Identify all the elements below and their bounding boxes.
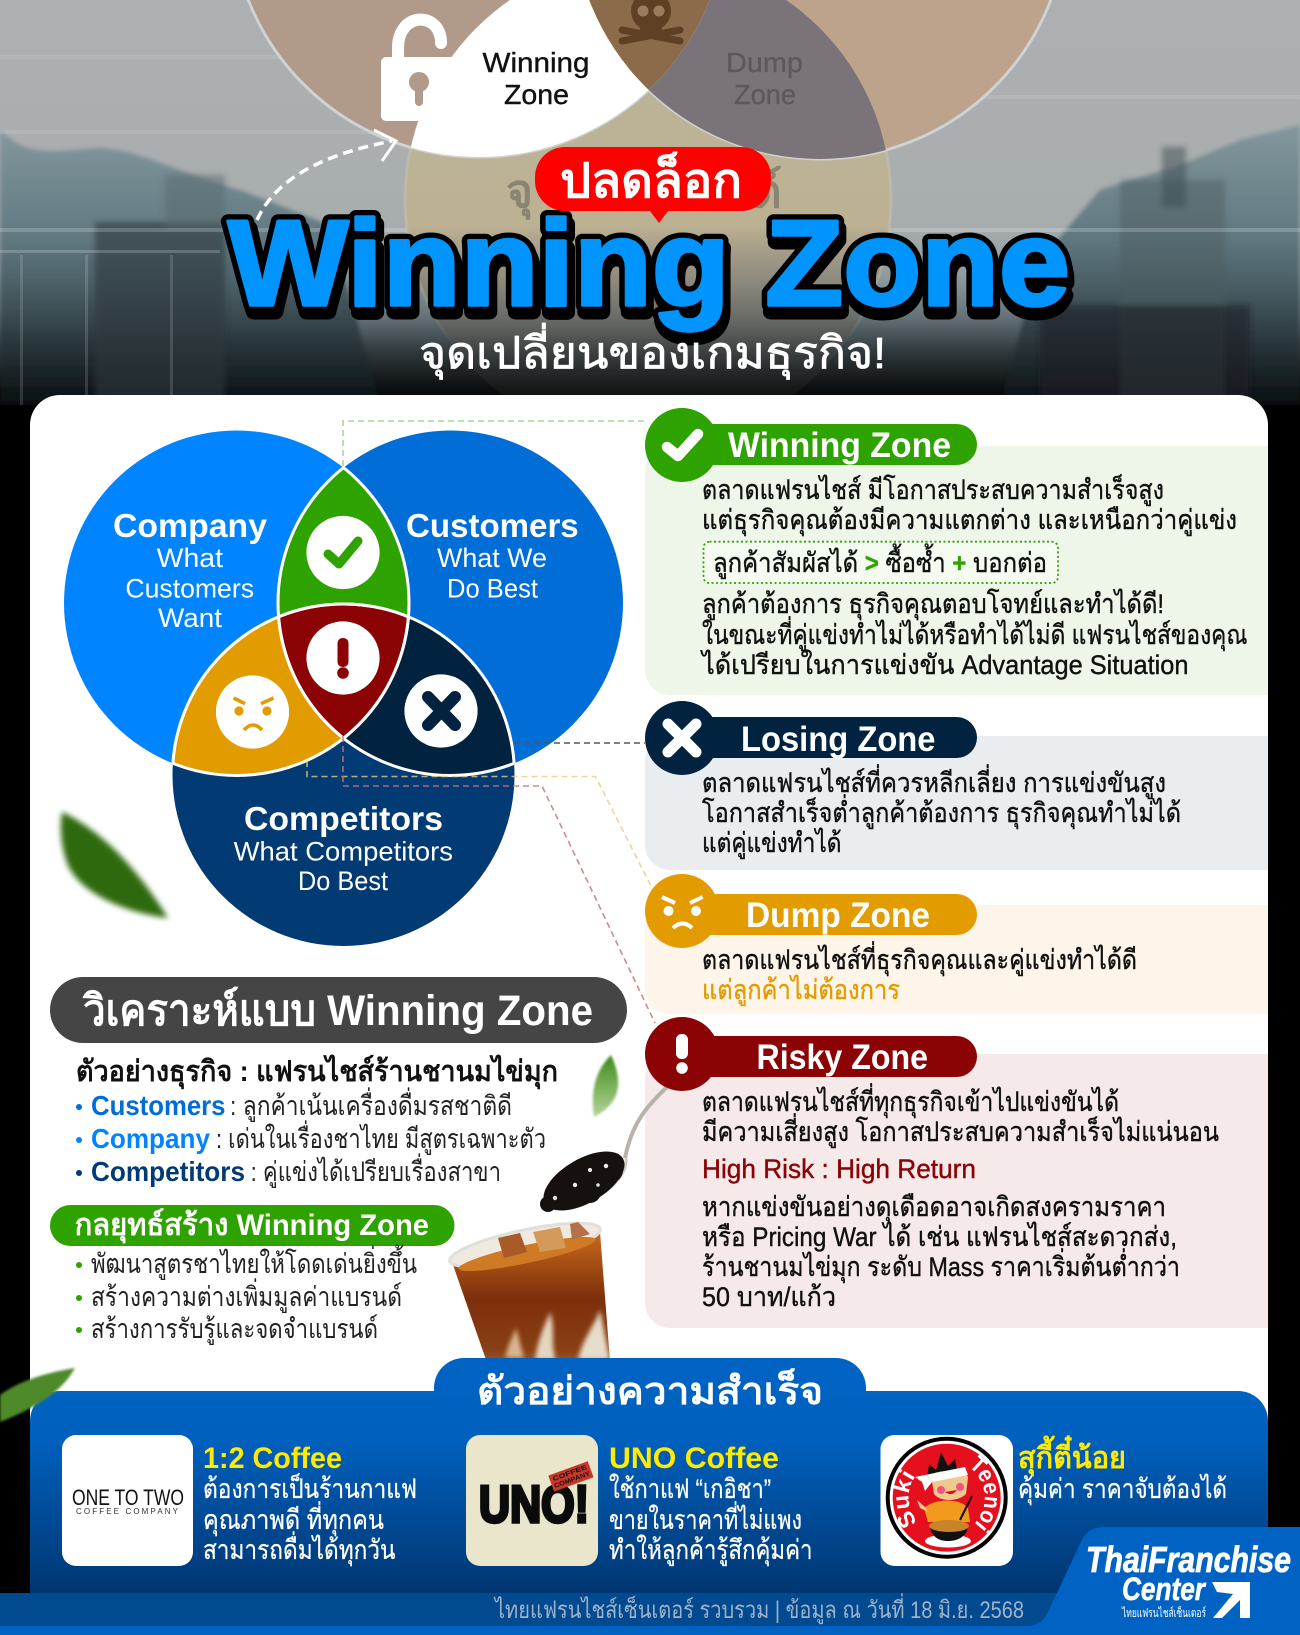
leaf left — [61, 812, 168, 918]
example: Suki Teenoi — [880, 1435, 1227, 1566]
example: 1:2 Coffee: ONE TO TWO — [72, 1485, 184, 1510]
logo mascot — [915, 1452, 972, 1548]
label: Competitors: Do Best — [298, 866, 388, 896]
top venn diagram — [246, 0, 1052, 395]
label: Competitors: Competitors — [244, 800, 443, 837]
badge: ปลดล็อก: ปลดล็อก — [560, 151, 742, 208]
icon: angry face — [216, 675, 289, 749]
zone header pill — [645, 874, 977, 948]
zone body text: มีความเสี่ยงสูง โอกาสประสบความสำเร็จไม่แน่นอน — [702, 1113, 1219, 1148]
example: UNO Coffee: UNO Coffee — [609, 1442, 779, 1475]
label: Competitors — [234, 800, 453, 896]
icon: exclamation — [306, 621, 380, 695]
title: Winning Zone: Winning Zone — [231, 202, 1071, 338]
icon: arrow — [1212, 1582, 1250, 1618]
label: Company — [113, 507, 268, 633]
zone body text — [702, 941, 1137, 1006]
arrow: dashed curve to padlock — [257, 130, 396, 220]
text block: business example: Customers — [91, 1090, 226, 1121]
example: 1:2 Coffee: สามารถดื่มได้ทุกวัน — [203, 1531, 396, 1567]
subtitle: จุดเปลี่ยนของเกมธุรกิจ! — [419, 322, 886, 380]
text block: business example: Competitors — [91, 1156, 245, 1187]
zone header pill: Losing Zone — [741, 720, 936, 759]
text block: business example: : ลูกค้าเน้นเครื่องดื่มรสชาติดี — [230, 1087, 512, 1122]
leaf near spoon — [593, 1055, 618, 1117]
text block: business example: Company — [91, 1123, 210, 1154]
zone body text: หรือ Pricing War ได้ เช่น แฟรนไชส์สะดวกส่ง, — [702, 1221, 1177, 1252]
zone header pill — [645, 701, 977, 775]
panel: Dump Zone — [645, 874, 1268, 1014]
title: Winning Zone: Winning Zone — [228, 195, 1070, 331]
zone body text: แต่ลูกค้าไม่ต้องการ — [702, 975, 900, 1006]
label: Company: Customers — [125, 574, 254, 604]
zone header pill: Winning Zone — [728, 426, 951, 465]
text block: business example — [76, 1054, 558, 1188]
label: Winning Zone top: Winning — [482, 47, 590, 78]
illustration: iced tea cup — [448, 1222, 612, 1358]
venn diagram — [64, 421, 655, 1023]
zone body text — [702, 764, 1181, 859]
hidden text behind badge: จุ — [506, 165, 533, 220]
heading: analysis pill: วิเคราะห์แบบ Winning Zone — [82, 986, 593, 1035]
callout: customer loop: ลูกค้าสัมผัสได้ > ซื้อซ้ำ + บอกต่อ — [713, 543, 1047, 579]
zone body text: ตลาดแฟรนไชส์ มีโอกาสประสบความสำเร็จสูง — [702, 472, 1164, 506]
label: Company: Company — [113, 507, 268, 544]
label: Winning Zone top — [482, 47, 590, 110]
label: Customers — [406, 507, 579, 604]
main white card — [30, 395, 1268, 1635]
example: UNO Coffee: COFFEE — [552, 1464, 589, 1483]
label: Winning Zone top: Zone — [504, 79, 569, 110]
zone body text: โอกาสสำเร็จต่ำลูกค้าต้องการ ธุรกิจคุณทำไม่ได้ — [702, 794, 1181, 830]
zone header pill — [645, 408, 977, 482]
zone body text: ลูกค้าต้องการ ธุรกิจคุณตอบโจทย์และทำได้ดี! — [702, 588, 1164, 621]
zone body text: ตลาดแฟรนไชส์ที่ธุรกิจคุณและคู่แข่งทำได้ดี — [702, 941, 1137, 977]
list: strategies: สร้างการรับรู้และจดจำแบรนด์ — [91, 1313, 378, 1345]
footer band — [0, 1593, 1300, 1635]
example: UNO Coffee: ทำให้ลูกค้ารู้สึกคุ้มค่า — [609, 1534, 812, 1567]
icon: open padlock — [381, 20, 471, 121]
example: 1:2 Coffee: 1:2 Coffee — [203, 1442, 342, 1475]
panel: success examples — [30, 1358, 1268, 1593]
label: Dump Zone top: Zone — [734, 79, 796, 110]
zone header pill: Risky Zone — [756, 1038, 928, 1077]
connector lines — [307, 421, 655, 1023]
logo: ThaiFranchise Center — [1028, 1527, 1300, 1635]
panel: Risky Zone — [534, 1017, 1268, 1328]
text block: business example: : เด่นในเรื่องชาไทย มีสูตรเฉพาะตัว — [216, 1120, 546, 1155]
title: Winning Zone: Winning Zone — [228, 195, 1070, 331]
example: UNO Coffee: ใช้กาแฟ “เกอิชา” — [609, 1473, 771, 1504]
zone body text: 50 บาท/แก้ว — [702, 1282, 836, 1312]
panel: Winning Zone — [645, 408, 1268, 695]
zone body text: แต่คู่แข่งทำได้ — [702, 828, 842, 859]
example: 1:2 Coffee: COFFEE COMPANY — [76, 1507, 179, 1516]
footer band: ไทยแฟรนไชส์เซ็นเตอร์ รวบรวม | ข้อมูล ณ วันที่ 18 มิ.ย. 2568 — [493, 1593, 1024, 1625]
label: Company: Want — [158, 603, 223, 633]
icon: cross — [404, 674, 478, 748]
logo: ThaiFranchise Center: ไทยแฟรนไชส์เซ็นเตอร์ — [1121, 1605, 1206, 1620]
zone body text: High Risk : High Return — [702, 1154, 976, 1184]
zone body text: ร้านชานมไข่มุก ระดับ Mass ราคาเริ่มต้นต่ำกว่า — [702, 1248, 1180, 1284]
logo: ThaiFranchise Center: Center — [1122, 1571, 1206, 1607]
zone body text: แต่ธุรกิจคุณต้องมีความแตกต่าง และเหนือกว่าคู่แข่ง — [702, 505, 1237, 537]
leaf bottom left — [0, 1368, 75, 1422]
zone body text — [702, 1083, 1219, 1312]
example: 1:2 Coffee: คุณภาพดี ที่ทุกคน — [203, 1501, 384, 1537]
heading: strategy pill: กลยุทธ์สร้าง Winning Zone — [75, 1208, 429, 1244]
text block: business example: : คู่แข่งได้เปรียบเรื่องสาขา — [251, 1153, 501, 1188]
zone body text: ตลาดแฟรนไชส์ที่ทุกธุรกิจเข้าไปแข่งขันได้ — [702, 1083, 1119, 1119]
zone header pill: Dump Zone — [746, 896, 930, 935]
panel: Losing Zone — [645, 701, 1268, 870]
example: 1:2 Coffee: ต้องการเป็นร้านกาแฟ — [203, 1471, 417, 1504]
zone body text: หากแข่งขันอย่างดุเดือดอาจเกิดสงครามราคา — [702, 1192, 1166, 1224]
heading: analysis pill — [50, 977, 627, 1043]
icon: skull and crossbones — [622, 0, 680, 41]
badge: ปลดล็อก — [535, 147, 771, 223]
zone body text: ตลาดแฟรนไชส์ที่ควรหลีกเลี่ยง การแข่งขันสูง — [702, 764, 1166, 799]
zone header pill — [645, 1017, 977, 1091]
list: strategies — [76, 1244, 417, 1345]
zone body text: ได้เปรียบในการแข่งขัน Advantage Situation — [700, 649, 1188, 680]
label: Customers: Do Best — [447, 574, 538, 604]
text block: business example: ตัวอย่างธุรกิจ : แฟรนไชส์ร้านชานมไข่มุก — [76, 1054, 558, 1089]
hidden text behind badge: ด์ — [752, 165, 782, 217]
label: Dump Zone top — [726, 47, 803, 110]
label: Dump Zone top: Dump — [726, 47, 803, 78]
list: strategies: พัฒนาสูตรชาไทยให้โดดเด่นยิ่งขึ้น — [91, 1244, 417, 1280]
label: Company: What — [157, 543, 224, 573]
example: UNO Coffee: UNO! — [479, 1476, 589, 1534]
list: strategies: สร้างความต่างเพิ่มมูลค่าแบรนด์ — [91, 1278, 402, 1313]
label: Customers: Customers — [406, 507, 579, 544]
example: Suki Teenoi: Teenoi — [972, 1454, 998, 1534]
example: Suki Teenoi: Suki — [894, 1469, 915, 1528]
illustration: spoon with boba — [534, 1086, 668, 1223]
example: Suki Teenoi: คุ้มค่า ราคาจับต้องได้ — [1018, 1474, 1227, 1506]
example: 1:2 Coffee — [62, 1435, 417, 1567]
example: UNO Coffee — [466, 1435, 812, 1567]
example: UNO Coffee: COMPANY — [553, 1470, 592, 1490]
zone body text — [700, 472, 1248, 680]
heading: success examples: ตัวอย่างความสำเร็จ — [477, 1368, 823, 1413]
label: Customers: What We — [437, 543, 547, 573]
hidden text behind badge — [506, 165, 782, 220]
example: UNO Coffee: ขายในราคาที่ไม่แพง — [609, 1501, 802, 1535]
icon: check — [306, 516, 380, 589]
label: Competitors: What Competitors — [234, 837, 453, 867]
example: Suki Teenoi: สุกี้ตี๋น้อย — [1018, 1435, 1126, 1477]
